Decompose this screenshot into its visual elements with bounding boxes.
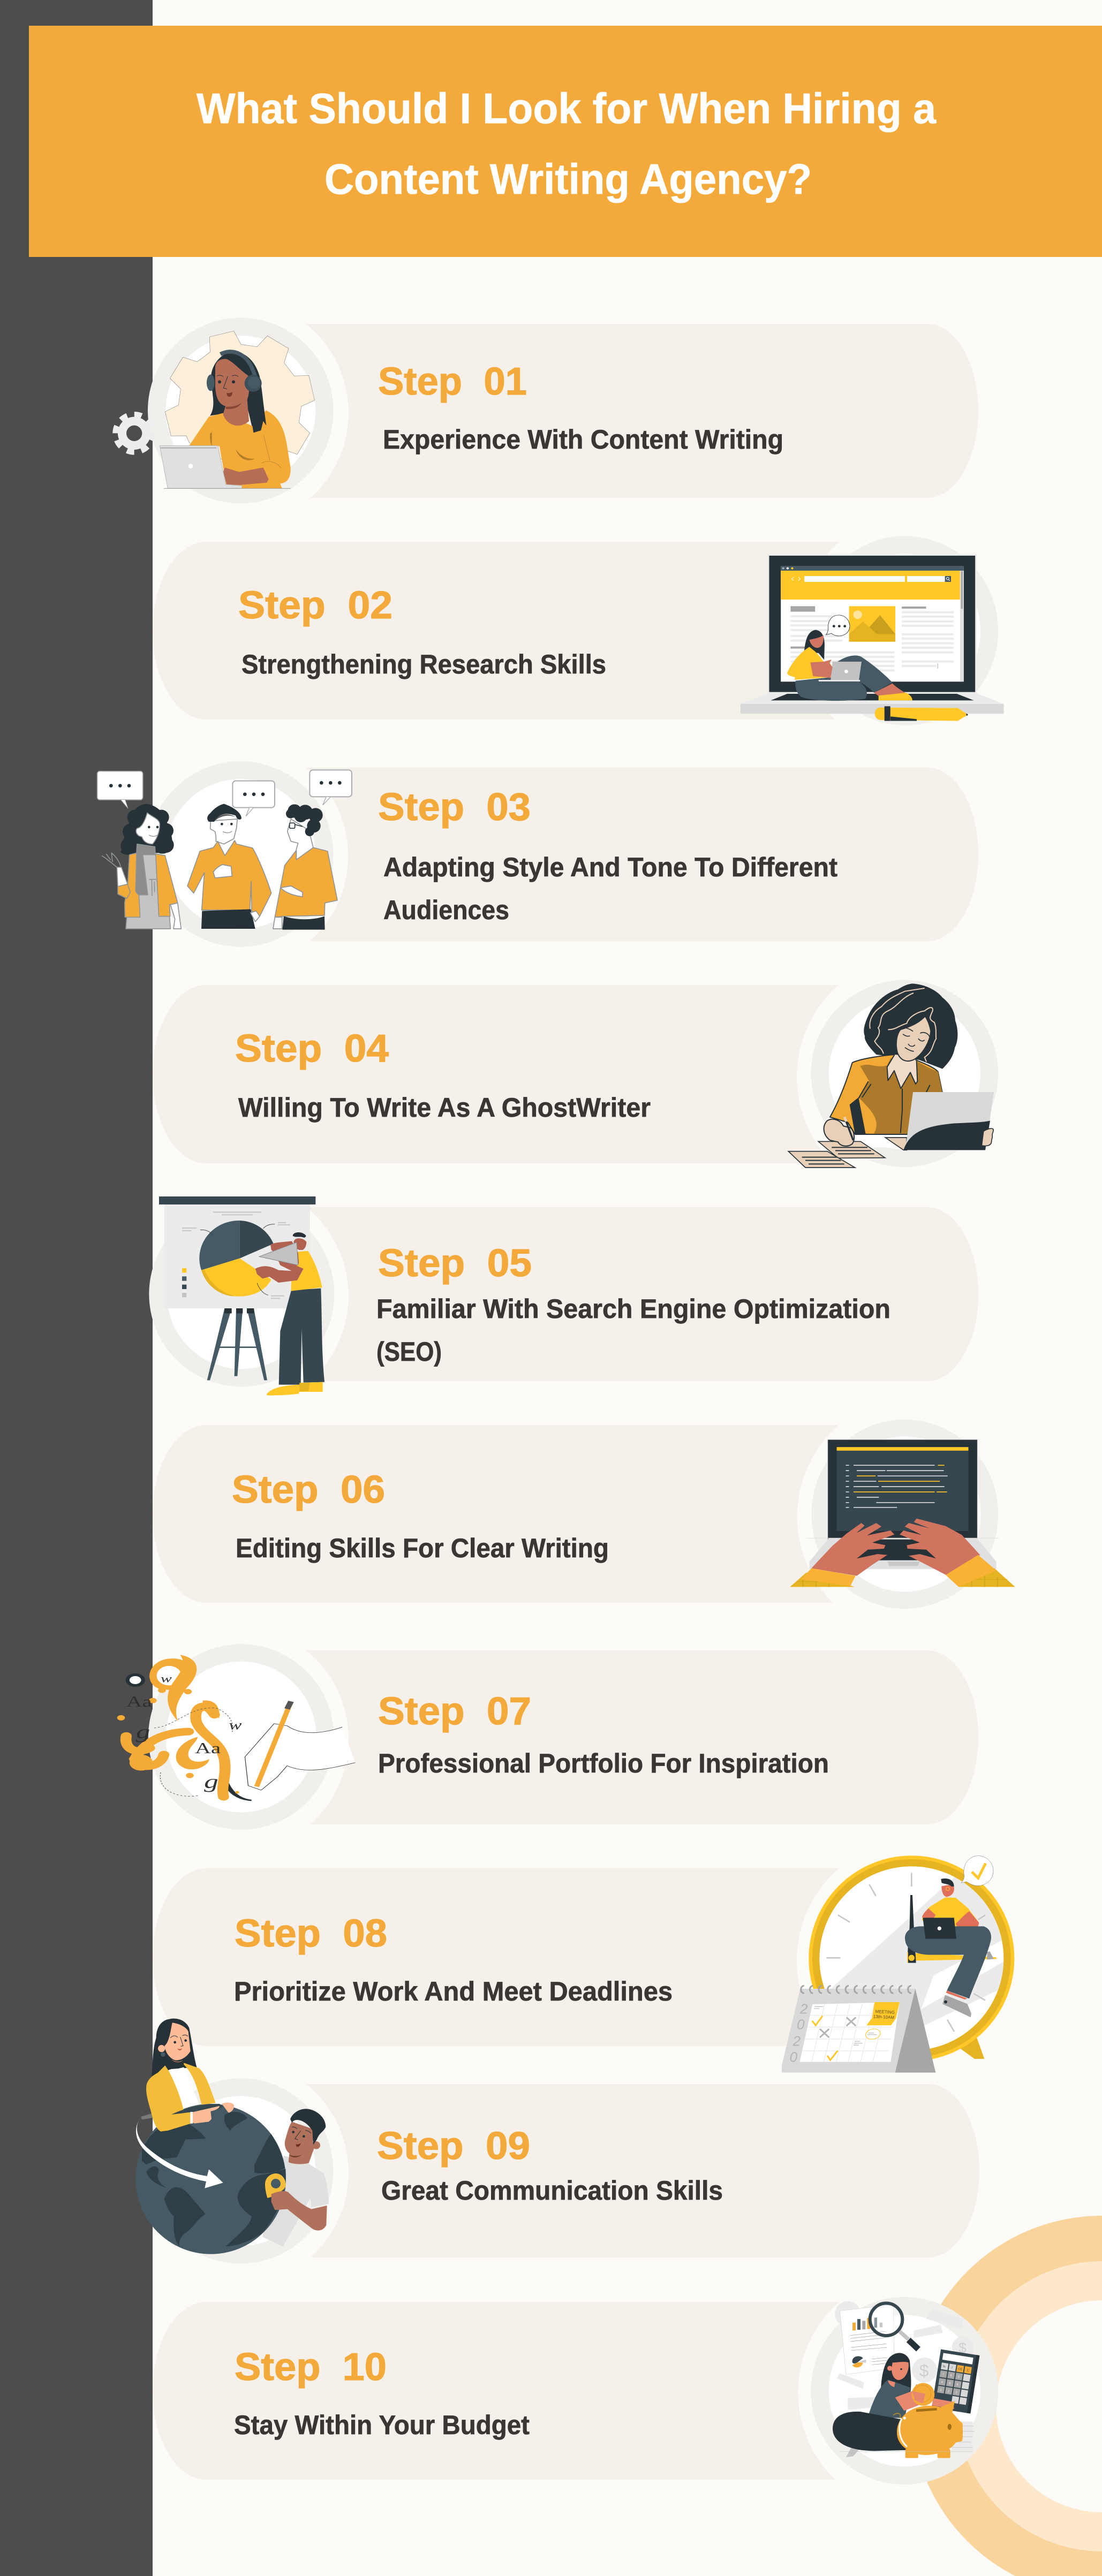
description line 1: Adapting Style And Tone To Different: [383, 852, 837, 882]
icon: woman on laptop screen: [741, 536, 1004, 725]
panel: step 07: [117, 1644, 978, 1830]
decorative rings bottom right: [911, 2216, 1102, 2576]
title banner: [29, 26, 1102, 257]
step description: Stay Within Your Budget: [234, 2410, 530, 2440]
panel: step 05: [149, 1196, 978, 1396]
title line 1: What Should I Look for When Hiring a: [197, 85, 936, 132]
calendar year: 2: [799, 2001, 808, 2017]
icon: typography and pencil: g: [204, 1770, 218, 1792]
step description: Strengthening Research Skills: [241, 649, 606, 679]
step label: Step 10: [235, 2346, 387, 2389]
icon: typography and pencil: g: [136, 1721, 150, 1742]
step label: Step 01: [378, 360, 527, 403]
sidebar: [0, 0, 153, 2576]
panel: step 02: [153, 536, 1004, 725]
icon: woman with piggy bank: 6: [956, 2383, 959, 2387]
icon: woman with piggy bank: 3: [955, 2391, 958, 2395]
icon: woman with piggy bank: 7: [942, 2373, 945, 2376]
step description: Experience With Content Writing: [383, 425, 783, 454]
icon: woman with piggy bank: 2: [947, 2390, 950, 2393]
icon: woman with piggy bank: C: [967, 2369, 970, 2373]
icon: woman with piggy bank: 4: [941, 2381, 944, 2384]
step label: Step 07: [378, 1690, 531, 1733]
icon: agent with headphones: [115, 318, 334, 503]
description line 1: Familiar With Search Engine Optimization: [376, 1294, 890, 1324]
panel: step 06: [153, 1420, 1015, 1609]
calendar year: [790, 2001, 808, 2065]
panel: step 03: [97, 761, 978, 947]
icon: woman writing: [788, 980, 998, 1168]
icon: woman with piggy bank: [811, 2297, 998, 2484]
panel: step 10: [153, 2297, 998, 2484]
description line 2: (SEO): [376, 1337, 442, 1367]
icon: woman with piggy bank: 1: [940, 2389, 942, 2392]
icon: woman with piggy bank: /: [951, 2367, 953, 2370]
panel: step 01: [115, 318, 978, 503]
icon: two people with globe: [135, 2019, 333, 2263]
title line 2: Content Writing Agency?: [324, 155, 812, 203]
description line 2: Audiences: [383, 895, 509, 925]
step description: Prioritize Work And Meet Deadlines: [234, 1976, 673, 2006]
panel: step 09: [135, 2019, 979, 2263]
icon: typography and pencil: w: [229, 1717, 242, 1732]
step label: Step 04: [235, 1027, 389, 1070]
step description: Great Communication Skills: [381, 2176, 723, 2206]
step label: Step 08: [235, 1912, 387, 1955]
icon: typography and pencil: w: [161, 1672, 172, 1685]
icon: three people talking: [97, 761, 352, 947]
panel: step 08: [153, 1855, 1014, 2073]
step label: Step 03: [378, 786, 531, 829]
calendar year: 0: [790, 2049, 798, 2065]
step label: Step 09: [377, 2125, 530, 2168]
calendar year: 0: [797, 2017, 805, 2033]
step description: Editing Skills For Clear Writing: [236, 1533, 609, 1563]
icon: typography and pencil: Aa: [126, 1693, 152, 1710]
calendar year: 2: [792, 2033, 801, 2049]
icon: woman with piggy bank: 8: [950, 2374, 953, 2378]
panel: step 04: [153, 980, 998, 1168]
icon: woman with piggy bank: 9: [957, 2375, 960, 2379]
icon: clock and calendar: 13th-10AM: [873, 2014, 894, 2020]
step description: Professional Portfolio For Inspiration: [378, 1748, 829, 1778]
icon: woman with piggy bank: $: [958, 2340, 967, 2356]
icon: woman with piggy bank: %: [942, 2365, 946, 2369]
icon: man presenting pie chart: [149, 1196, 334, 1396]
icon: typography and pencil: [117, 1644, 355, 1830]
step label: Step 06: [232, 1468, 385, 1511]
icon: woman with piggy bank: 5: [948, 2382, 951, 2385]
step description: [383, 852, 837, 925]
icon: woman with piggy bank: CE: [958, 2368, 963, 2372]
icon: woman with piggy bank: $: [919, 2361, 929, 2380]
icon: clock and calendar: [782, 1855, 1014, 2073]
step description: [376, 1294, 890, 1367]
icon: clock and calendar: MEETING: [875, 2009, 895, 2015]
icon: hands typing on laptop: [790, 1420, 1015, 1609]
step label: Step 02: [238, 584, 393, 627]
step description: Willing To Write As A GhostWriter: [238, 1093, 651, 1123]
step label: Step 05: [378, 1242, 532, 1285]
icon: typography and pencil: Aa: [195, 1740, 221, 1757]
